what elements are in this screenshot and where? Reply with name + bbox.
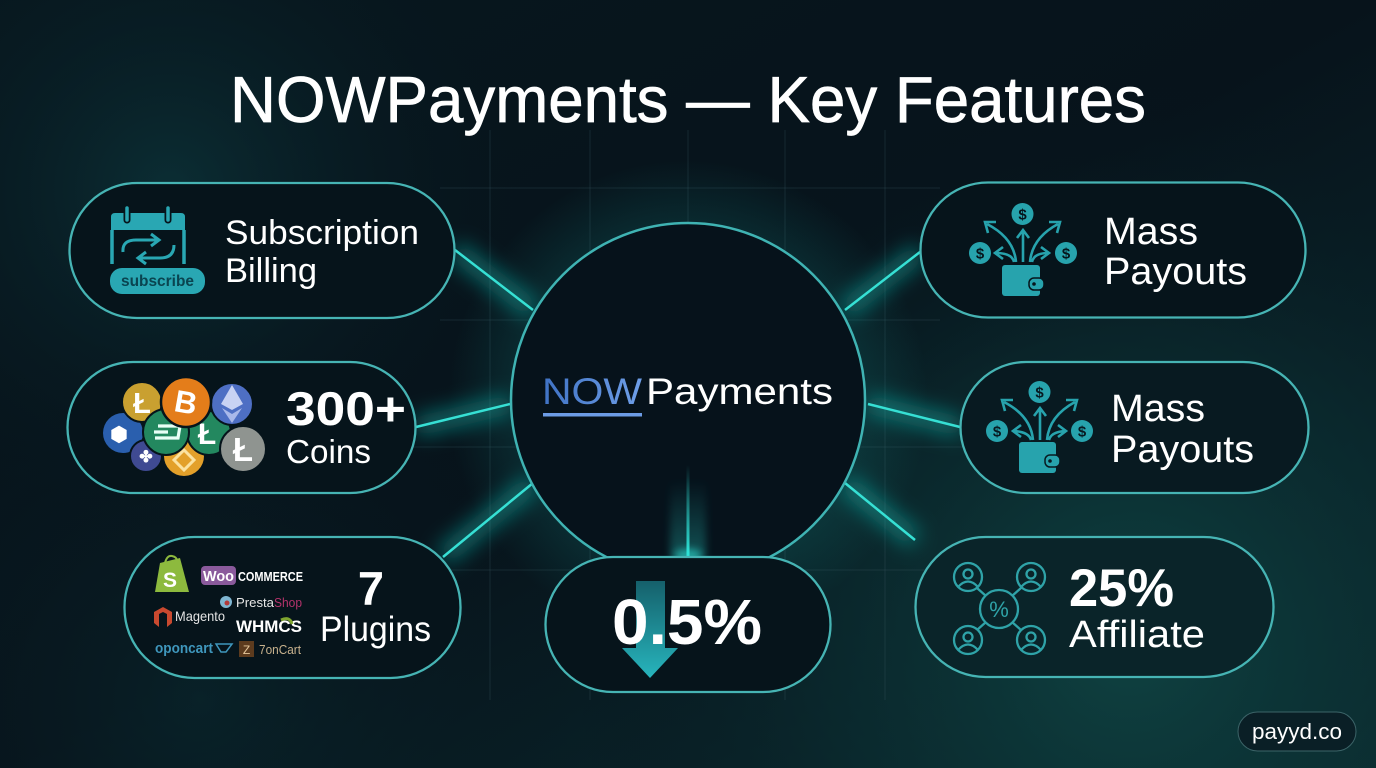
label: Subscription: [225, 214, 419, 252]
logo: OpenCart: oponcart: [155, 641, 213, 657]
icon: coin cluster: ✤: [139, 449, 153, 466]
icon: wallet payouts: $: [1035, 384, 1044, 402]
panel: mass payouts top: [920, 182, 1306, 318]
icon: wallet payouts: $: [1062, 246, 1071, 262]
logo: Shopify: S: [163, 569, 177, 592]
icon: down arrow: [622, 581, 678, 678]
label: [286, 382, 406, 470]
connector lines: [416, 250, 960, 557]
label: Coins: [286, 433, 371, 470]
label: Payouts: [1111, 429, 1254, 471]
logo: NOWPayments: [542, 371, 833, 416]
icon: calendar subscribe: subscribe: [121, 273, 194, 290]
label: [1069, 559, 1205, 656]
logo: WooCommerce: COMMERCE: [238, 569, 303, 584]
panel: 0.5% fee: [546, 557, 830, 692]
logo: PrestaShop: Shop: [274, 596, 302, 610]
icon: wallet payouts: $: [1018, 206, 1027, 224]
panel: 7 plugins: [124, 537, 460, 678]
label: Payouts: [1104, 251, 1247, 293]
label: 300+: [286, 382, 406, 435]
logo: Magento: [154, 607, 225, 627]
icon: coin cluster: B: [172, 383, 200, 422]
logo: PrestaShop: [220, 596, 302, 610]
icon: coin cluster: Ł: [198, 418, 216, 451]
icon: coin cluster: Ł: [133, 388, 151, 420]
logo: WHMCS: WHMCS: [236, 617, 302, 636]
panel: 25% affiliate: [916, 537, 1274, 677]
panel: mass payouts middle: [960, 362, 1308, 493]
vertical connector beam: [670, 465, 706, 563]
logo: PrestaShop: Presta: [236, 596, 274, 610]
icon: wallet payouts: $: [1078, 424, 1087, 440]
label: 7: [358, 562, 384, 615]
icon: coin cluster: [103, 377, 266, 477]
icon: wallet payouts: $: [976, 246, 985, 262]
watermark badge: payyd.co: [1252, 719, 1342, 744]
label: 0.5%: [612, 586, 762, 658]
label: [320, 562, 431, 649]
label: [1104, 211, 1247, 293]
icon: coin cluster: ⬢: [110, 424, 128, 446]
logo: ZenCart: Z: [243, 643, 250, 657]
logo: Shopify: [155, 556, 189, 592]
logo: ZenCart: 7onCart: [259, 642, 301, 657]
label: Mass: [1111, 388, 1205, 430]
title: NOWPayments — Key Features: [230, 63, 1146, 136]
watermark badge: [1238, 712, 1356, 751]
label: Plugins: [320, 610, 431, 649]
icon: calendar subscribe: [110, 207, 205, 294]
logo: ZenCart: [239, 641, 301, 657]
logo: WooCommerce: [201, 566, 303, 585]
label: Billing: [225, 252, 317, 290]
icon: wallet payouts: [969, 203, 1077, 296]
label: [1111, 388, 1254, 471]
icon: wallet payouts: $: [993, 424, 1002, 440]
panel: 300+ coins: [68, 362, 416, 493]
panel: subscription billing: [70, 183, 454, 318]
icon: affiliate network: [954, 563, 1045, 654]
icons: platform logos: [154, 556, 303, 657]
label: Mass: [1104, 211, 1198, 253]
logo: NOWPayments: NOW: [542, 371, 642, 412]
label: [225, 214, 419, 290]
logo: Magento: Magento: [175, 608, 225, 624]
icon: affiliate network: %: [989, 597, 1009, 622]
logo: WooCommerce: Woo: [203, 568, 234, 585]
central hub circle: [511, 223, 865, 577]
label: Affiliate: [1069, 614, 1205, 656]
logo: NOWPayments: Payments: [646, 371, 833, 412]
icon: coin cluster: Ł: [233, 431, 253, 468]
icon: wallet payouts: [986, 381, 1093, 473]
label: 25%: [1069, 559, 1174, 618]
